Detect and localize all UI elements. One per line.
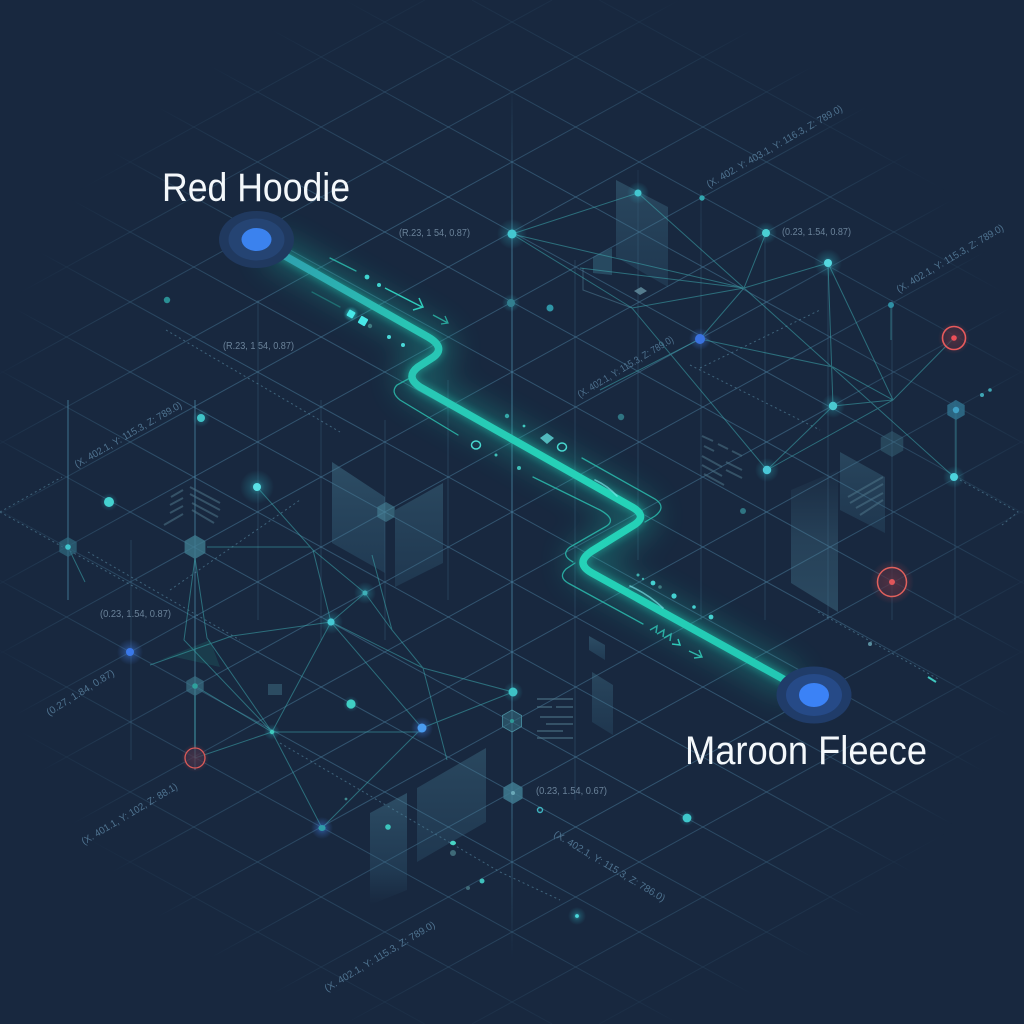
node 638,193 xyxy=(627,182,649,204)
coordinates: slanted center right: (X. 402.1, Y: 115.3, Z: 789.0) xyxy=(576,334,676,401)
panel: glass with text lines right xyxy=(840,452,885,533)
node 828,263 xyxy=(814,249,842,277)
node 512,234 xyxy=(497,219,527,249)
data lines block bottom center xyxy=(537,699,573,738)
data lines block upper center right xyxy=(702,436,742,485)
label: Maroon Fleece: Maroon Fleece xyxy=(685,729,927,773)
node 550,308 xyxy=(546,304,554,312)
hex node xyxy=(947,400,965,420)
panel: small tiles near bottom center xyxy=(268,636,613,735)
panel: isometric cube left xyxy=(332,462,443,587)
node 954,477 xyxy=(943,466,965,488)
network: upper right edges xyxy=(512,193,956,477)
nodes: upper right network xyxy=(497,182,992,514)
node 621,417 xyxy=(618,414,624,420)
node 422,728 xyxy=(411,717,433,739)
coordinates: slanted far right: (X. 402.1, Y: 115.3, Z: 789.0) xyxy=(895,223,1006,296)
tiny node xyxy=(345,798,347,800)
label: Red Hoodie: Red Hoodie xyxy=(162,166,350,210)
icon: hexagon on cube xyxy=(377,502,395,522)
red node lower right xyxy=(870,560,914,604)
node 833,406 xyxy=(821,394,845,418)
hex node 195,686 xyxy=(186,676,204,696)
panel: tall glass upper right xyxy=(583,180,668,308)
dim node 167,300 xyxy=(164,297,170,303)
small pair 482 xyxy=(466,878,484,890)
node 365,593 xyxy=(354,582,376,604)
secondary thin route lines xyxy=(312,258,661,624)
node 201,418 xyxy=(192,409,210,427)
teal mark right xyxy=(868,642,936,682)
node 331,622 xyxy=(319,610,343,634)
blue node 130,652 xyxy=(117,639,143,665)
panel: bottom pair left xyxy=(370,793,407,905)
coordinates: slanted bottom: (X. 402.1, Y: 115.3, Z: 789.0) xyxy=(323,920,437,995)
route particles lower xyxy=(636,574,713,619)
coordinates: slanted left middle: (0.27, 1.84, 0.87) xyxy=(45,668,117,719)
coordinates: horizontal tag left: (0.23, 1.54, 0.87) xyxy=(100,609,171,620)
arrow lower xyxy=(689,650,702,658)
blue node xyxy=(689,328,711,350)
node 577,916 xyxy=(568,907,586,925)
node 687,818 xyxy=(679,810,695,826)
panel: tall fading right xyxy=(791,470,838,612)
dim node xyxy=(502,294,520,312)
node 388,827 xyxy=(385,824,391,830)
node: Red Hoodie start xyxy=(219,211,294,268)
coordinates: slanted left bottom: (X. 401.1, Y: 102, Z: 88.1) xyxy=(80,781,180,848)
node 272,732 xyxy=(264,724,280,740)
chevrons lower xyxy=(650,626,680,645)
node 702,198 xyxy=(699,195,705,201)
pair of small nodes xyxy=(980,388,992,397)
panel: bottom pair right xyxy=(417,748,486,862)
node: Maroon Fleece end xyxy=(776,666,852,724)
main route: Red Hoodie to Maroon Fleece xyxy=(278,252,785,680)
hex node 513,793 xyxy=(503,782,523,804)
node 513,692 xyxy=(503,682,523,702)
red node 195,758 xyxy=(181,744,209,772)
node 257,487 xyxy=(240,470,274,504)
network: lower left edges xyxy=(68,487,513,828)
data lines block left xyxy=(164,487,220,525)
small pair 453 xyxy=(450,841,456,856)
node 743,511 xyxy=(740,508,746,514)
route particles upper xyxy=(345,275,405,347)
highlights on route xyxy=(595,480,663,608)
hex node 68,547 xyxy=(59,537,77,557)
coordinates: horizontal tag top right: (0.23, 1.54, 0.87) xyxy=(782,227,851,238)
coordinates: horizontal tag bottom center: (0.23, 1.54, 0.67) xyxy=(536,786,607,797)
coordinates: slanted left top: (X. 402.1, Y: 115.3, Z: 789.0) xyxy=(73,400,184,471)
node 351,704 xyxy=(343,696,359,712)
node 109,502 xyxy=(100,493,118,511)
node 767,470 xyxy=(755,458,779,482)
red node xyxy=(938,322,970,354)
path glow xyxy=(278,252,785,680)
node 766,233 xyxy=(755,222,777,244)
route particles middle xyxy=(472,414,566,470)
coordinates: horizontal tag left center: (R.23, 1 54, 0.87) xyxy=(223,341,294,352)
node 322,828 xyxy=(311,817,333,839)
wedge highlight near left hub xyxy=(160,640,220,667)
arrow upper small xyxy=(433,315,448,324)
ring node 540,810 xyxy=(538,808,542,812)
node 891,305 xyxy=(888,302,894,308)
coordinates: slanted down bottom center: (X. 402.1, Y: 115.3, Z: 786.0) xyxy=(551,829,667,904)
arrow upper xyxy=(385,288,423,310)
dotted guide lines xyxy=(0,310,1018,900)
hex node 195,547 xyxy=(185,535,205,559)
nodes: lower left network xyxy=(59,297,936,925)
coordinates: horizontal tag top center: (R.23, 1 54, 0.87) xyxy=(399,228,470,239)
hex dim xyxy=(881,431,903,457)
hex node 512,721 xyxy=(502,710,522,732)
coordinates: slanted top right: (X. 402. Y: 403.1, Y: 116.3, Z: 789.0) xyxy=(705,104,845,191)
